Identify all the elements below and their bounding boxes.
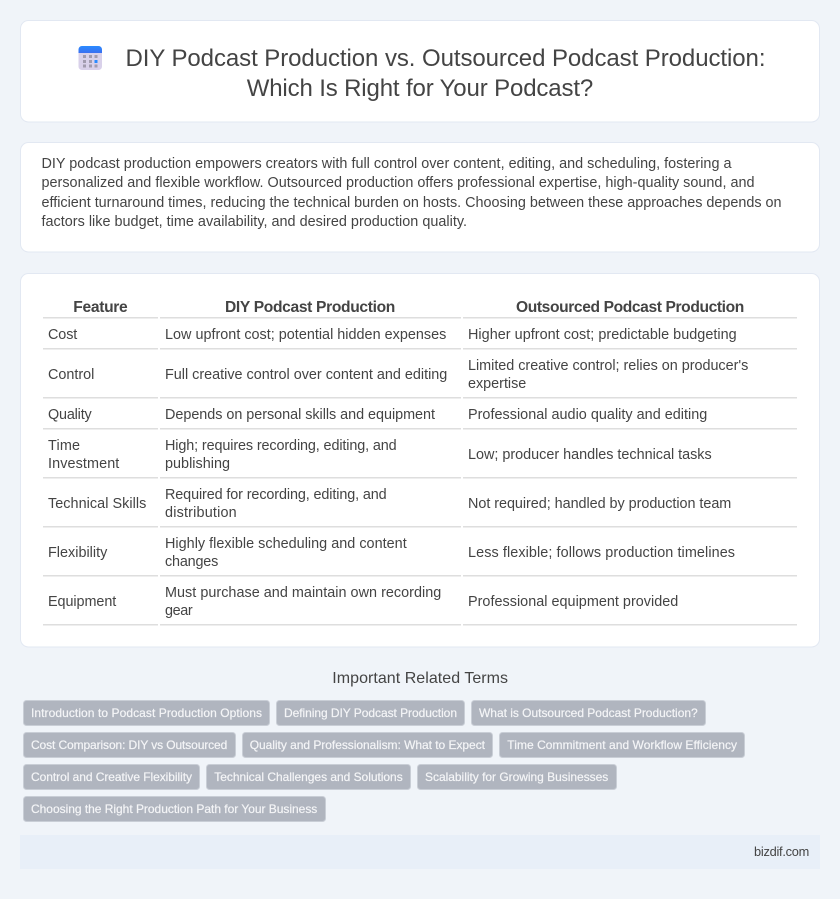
table row: Control: expertise xyxy=(468,376,526,392)
table row: Flexibility: changes xyxy=(165,554,218,570)
tag: Time Commitment and Workflow Efficiency xyxy=(507,738,737,752)
tag xyxy=(276,700,464,726)
tag: Scalability for Growing Businesses xyxy=(425,770,608,784)
table row: Flexibility: Highly flexible scheduling and content xyxy=(165,536,407,552)
table row: Technical Skills: Required for recording, editing, and xyxy=(165,487,387,503)
table row: Technical Skills: distribution xyxy=(165,505,237,521)
table row: Time Investment: Low; producer handles technical tasks xyxy=(468,447,712,463)
table row: Cost xyxy=(43,327,797,350)
table row: Time Investment: Time xyxy=(48,438,80,454)
table row: Technical Skills: Not required; handled by production team xyxy=(468,496,731,512)
table row: Quality: Depends on personal skills and equipment xyxy=(165,407,435,423)
icon: calendar xyxy=(78,46,102,70)
table row: Time Investment: Investment xyxy=(48,456,119,472)
text block: introduction paragraph: efficient turnaround times, reducing the technical burden on hosts. Choosing between these approaches depends on xyxy=(42,195,782,211)
heading: important related terms: Important Related Terms xyxy=(332,670,508,687)
table row: Cost: Low upfront cost; potential hidden expenses xyxy=(165,327,446,343)
table row: Technical Skills xyxy=(43,487,797,528)
table row: Equipment: Professional equipment provided xyxy=(468,594,678,610)
table row: Equipment xyxy=(43,585,797,626)
text block: introduction paragraph: factors like budget, time availability, and desired production quality. xyxy=(42,214,467,230)
tag: Quality and Professionalism: What to Expect xyxy=(250,738,486,752)
table row: Quality xyxy=(43,407,797,430)
table row: Cost: Cost xyxy=(48,327,77,343)
table row: Quality: Professional audio quality and editing xyxy=(468,407,707,423)
tag xyxy=(24,700,270,726)
table header row: Outsourced Podcast Production xyxy=(516,299,744,316)
table row: Flexibility: Less flexible; follows production timelines xyxy=(468,545,735,561)
text block: introduction paragraph xyxy=(42,156,782,230)
panel: comparison table xyxy=(20,274,820,647)
tag xyxy=(24,732,236,758)
table header row: DIY Podcast Production xyxy=(225,299,395,316)
table row: Control: Control xyxy=(48,367,94,383)
tag: What is Outsourced Podcast Production? xyxy=(479,706,698,720)
table row: Equipment: gear xyxy=(165,603,193,619)
panel: header xyxy=(20,20,820,122)
title: DIY Podcast Production vs. Outsourced Podcast Production: xyxy=(126,45,766,72)
tag: Defining DIY Podcast Production xyxy=(284,706,457,720)
tag xyxy=(24,796,326,822)
tag xyxy=(24,764,200,790)
table row: Control xyxy=(43,358,797,398)
table row: Time Investment xyxy=(43,438,797,478)
tag xyxy=(418,764,616,790)
tag: Control and Creative Flexibility xyxy=(31,770,192,784)
table row: Control: Full creative control over content and editing xyxy=(165,367,447,383)
table row: Technical Skills: Technical Skills xyxy=(48,496,146,512)
table row: Cost: Higher upfront cost; predictable budgeting xyxy=(468,327,737,343)
table row: Quality: Quality xyxy=(48,407,92,423)
tag xyxy=(242,732,492,758)
tag: Technical Challenges and Solutions xyxy=(214,770,403,784)
title: Which Is Right for Your Podcast? xyxy=(247,75,593,102)
tag: Choosing the Right Production Path for Your Business xyxy=(31,802,317,816)
text block: introduction paragraph: DIY podcast production empowers creators with full control over content, editing, and scheduling, fostering a xyxy=(42,156,732,172)
tag: Cost Comparison: DIY vs Outsourced xyxy=(31,738,227,752)
footer xyxy=(20,835,820,869)
table row: Equipment: Equipment xyxy=(48,594,116,610)
table header row: Feature xyxy=(73,299,128,316)
tag xyxy=(500,732,744,758)
table row: Time Investment: High; requires recording, editing, and xyxy=(165,438,397,454)
table row: Flexibility xyxy=(43,536,797,576)
tag xyxy=(472,700,706,726)
table header row xyxy=(43,299,797,318)
title xyxy=(126,45,766,102)
tag xyxy=(206,764,410,790)
table row: Time Investment: publishing xyxy=(165,456,230,472)
tag: Introduction to Podcast Production Options xyxy=(31,706,262,720)
tag list: related terms xyxy=(24,700,744,822)
footer text: source: bizdif.com xyxy=(754,844,809,859)
table row: Control: Limited creative control; relies on producer's xyxy=(468,358,748,374)
text block: introduction paragraph: personalized and flexible workflow. Outsourced production offers professional expertise, high-quality sound, and xyxy=(42,175,754,191)
table row: Equipment: Must purchase and maintain own recording xyxy=(165,585,441,601)
table row: Flexibility: Flexibility xyxy=(48,545,108,561)
panel: introduction xyxy=(20,142,820,252)
